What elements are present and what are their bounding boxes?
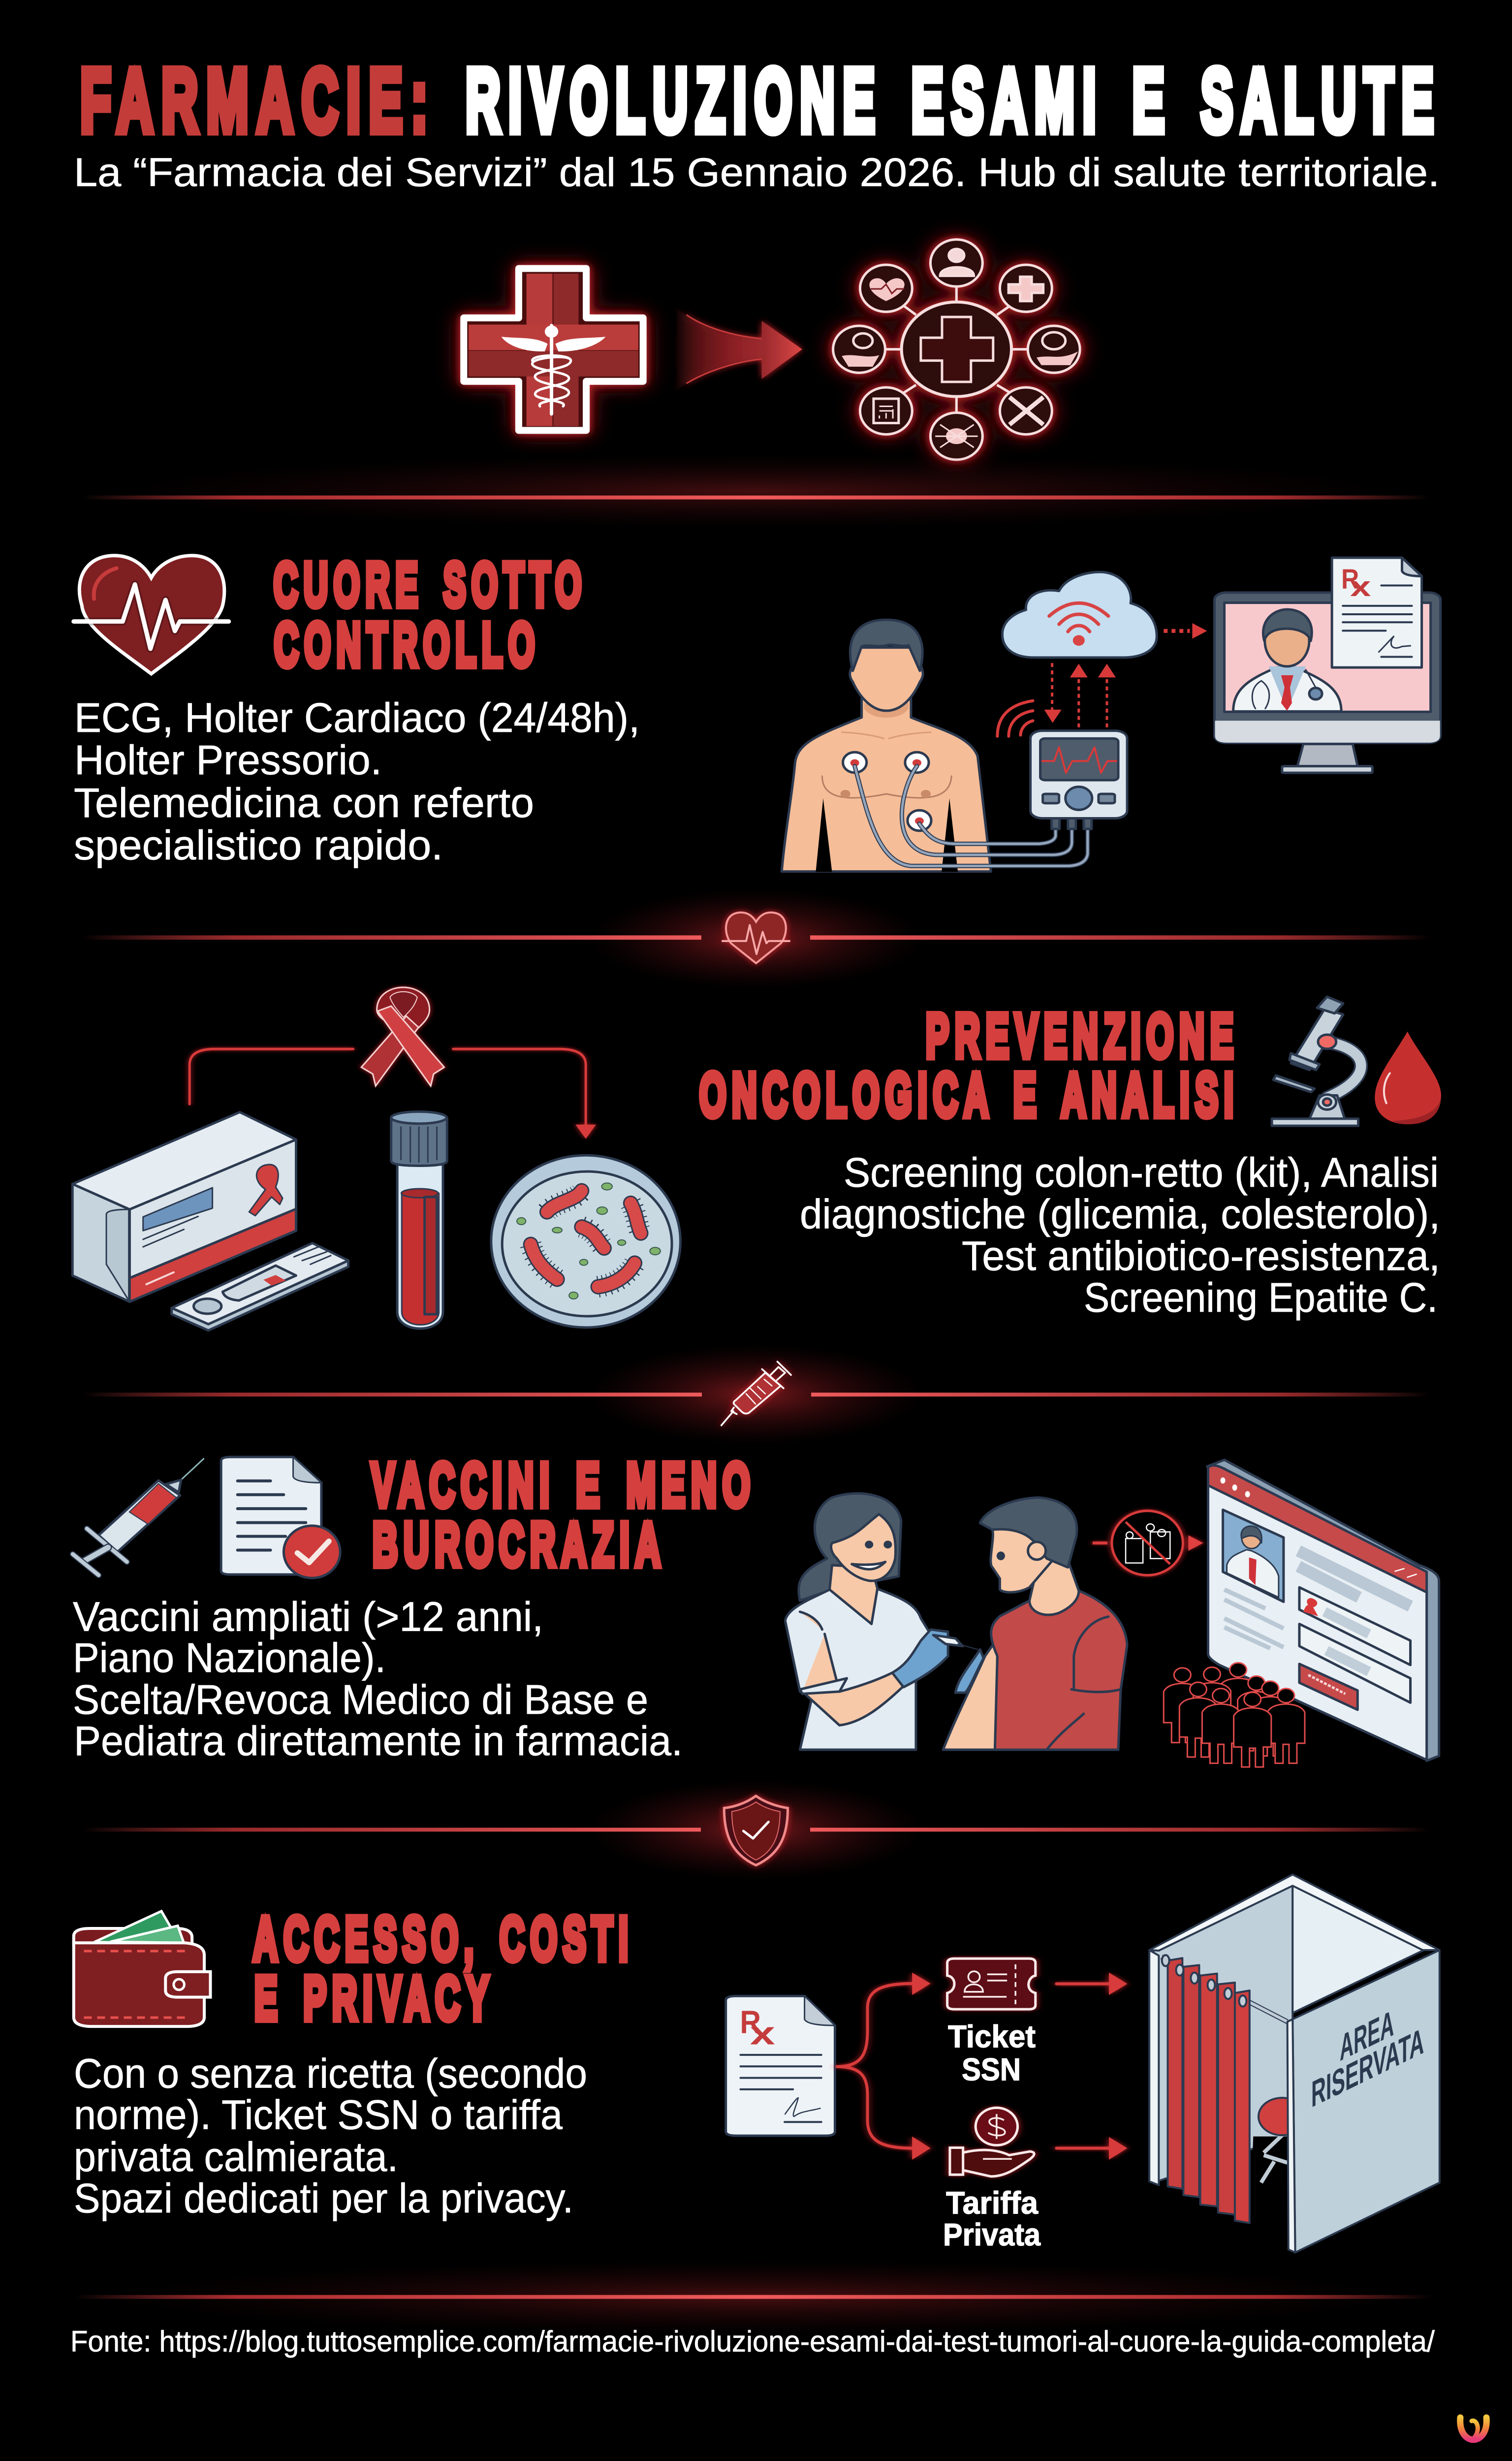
panel: cuore sotto controllo [74, 551, 1441, 872]
icon: heart [723, 913, 789, 963]
label: area riservata: RISERVATA [1311, 2019, 1424, 2115]
icon: heart with ECG [74, 556, 229, 674]
icon: logo [1460, 2418, 1486, 2440]
text block: Spazi dedicati per la privacy. [74, 2175, 573, 2222]
heading: BUROCRAZIA [373, 1511, 666, 1579]
text block: Pediatra direttamente in farmacia. [74, 1718, 683, 1765]
icon: microscope and blood drop [1272, 997, 1441, 1126]
icon: shield [724, 1796, 788, 1865]
data arrows [1044, 623, 1207, 727]
diagram: service hub [833, 240, 1080, 460]
document [221, 1457, 340, 1578]
wires [855, 766, 1088, 866]
heading [253, 1904, 634, 2033]
panel: accesso, costi e privacy [74, 1874, 1440, 2252]
icon: syringe and checked document [73, 1457, 340, 1578]
divider with heart [82, 889, 1430, 989]
icon: syringe [722, 1361, 791, 1425]
text block: norme). Ticket SSN o tariffa [74, 2092, 563, 2138]
no-crowd sign [1093, 1511, 1203, 1575]
icon: pharmacy cross with caduceus [464, 268, 643, 430]
heading [371, 1451, 756, 1579]
text block: Test antibiotico-resistenza, [962, 1233, 1440, 1279]
title: FARMACIE: [80, 51, 436, 151]
divider with shield [82, 1780, 1430, 1880]
icon: ticket [947, 1958, 1036, 2009]
nurse and patient [785, 1493, 1127, 1750]
crowd [1164, 1663, 1305, 1767]
portal window [1207, 1460, 1439, 1761]
text block: Holter Pressorio. [74, 737, 382, 783]
arrow [673, 306, 802, 393]
text block: Scelta/Revoca Medico di Base e [73, 1676, 648, 1723]
heading: CONTROLLO [274, 611, 540, 679]
holter device [1031, 731, 1127, 829]
panel: hero transformation [464, 240, 1080, 460]
icon: wallet [74, 1911, 210, 2026]
label: tariffa privata: Privata [943, 2218, 1041, 2252]
divider with syringe [82, 1344, 1430, 1444]
text block [800, 1149, 1440, 1321]
label: ticket ssn [948, 2019, 1036, 2087]
label: area riservata [1311, 2001, 1424, 2115]
diagram: prescription, ticket, private fee, reserved area: x [750, 2015, 775, 2051]
text block: ECG, Holter Cardiaco (24/48h), [74, 694, 640, 741]
panel: prevenzione oncologica [72, 987, 1441, 1330]
illustration: patient, holter, cloud, doctor [782, 558, 1441, 872]
text block: Screening Epatite C. [1084, 1274, 1438, 1321]
microscope [1272, 997, 1361, 1126]
text block: privata calmierata. [74, 2134, 398, 2180]
text block: Vaccini ampliati (>12 anni, [73, 1593, 543, 1640]
text block: specialistico rapido. [74, 822, 443, 869]
drop [1375, 1032, 1441, 1124]
heading [699, 1002, 1239, 1130]
heading [274, 551, 587, 679]
diagram: prescription, ticket, private fee, reserved area: R [740, 2004, 761, 2040]
panel: accesso, costi e privacy: ACCESSO, COSTI [253, 1904, 634, 1973]
illustration: patient, holter, cloud, doctor: R [1341, 564, 1359, 595]
divider [82, 454, 1430, 528]
text block: Con o senza ricetta (secondo [74, 2051, 587, 2097]
subtitle: La “Farmacia dei Servizi” dal 15 Gennaio 2026. Hub di salute territoriale. [74, 150, 1440, 195]
text block: Telemedicina con referto [74, 780, 534, 826]
label: ticket ssn: SSN [962, 2052, 1021, 2087]
text block [74, 694, 640, 869]
label: area riservata: AREA [1340, 2001, 1394, 2069]
panel: cuore sotto controllo: CUORE SOTTO [274, 551, 587, 619]
test kit box [72, 1112, 348, 1330]
blood tube [391, 1111, 447, 1328]
divider [74, 2260, 1432, 2334]
prescription [726, 1996, 835, 2136]
icon: coin and hand [950, 2108, 1034, 2177]
illustration: patient, holter, cloud, doctor: x [1350, 570, 1371, 602]
monitor [1215, 558, 1441, 773]
text block [73, 1593, 683, 1765]
text block [74, 2051, 587, 2222]
text block: Piano Nazionale). [73, 1635, 386, 1681]
connector arrows and ribbon [189, 987, 596, 1139]
label: tariffa privata: Tariffa [946, 2186, 1039, 2221]
signal waves [997, 701, 1033, 736]
label: tariffa privata [943, 2186, 1041, 2252]
branching arrows [837, 1973, 1127, 2160]
patient [782, 620, 991, 872]
title [80, 51, 1442, 151]
heading: E PRIVACY [254, 1964, 495, 2033]
illustration: vaccination and online portal [785, 1460, 1439, 1767]
label: ticket ssn: Ticket [948, 2019, 1036, 2054]
illustration: kit, tube, petri dish [72, 987, 680, 1330]
private booth [1149, 1874, 1440, 2252]
cloud [1002, 572, 1157, 658]
petri dish [491, 1155, 680, 1327]
panel: vaccini e meno burocrazia [73, 1451, 1439, 1767]
syringe [73, 1459, 204, 1575]
diagram: prescription, ticket, private fee, reserved area [726, 1874, 1440, 2252]
heading: VACCINI E MENO [371, 1451, 756, 1519]
